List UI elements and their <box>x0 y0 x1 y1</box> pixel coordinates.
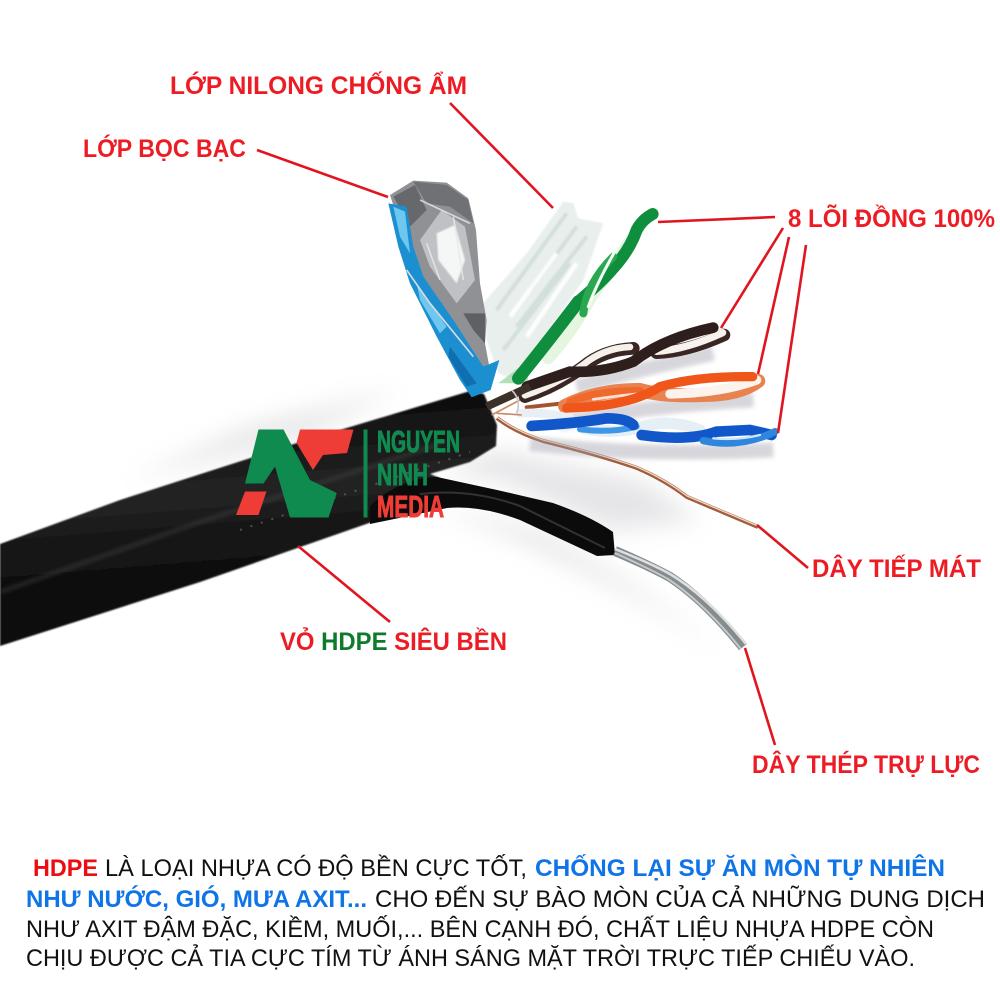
description paragraph: HDPE <box>33 855 98 882</box>
blue wire pair <box>520 413 775 443</box>
steel support wire <box>615 549 746 649</box>
logo: Nguyen Ninh Media <box>236 424 460 524</box>
black HDPE cable jacket <box>0 391 615 646</box>
soft photo shadows <box>130 390 720 650</box>
description paragraph <box>26 854 985 972</box>
label: steel wire: DÂY THÉP TRỰ LỰC <box>752 749 980 779</box>
label: nylon layer: LỚP NILONG CHỐNG ẨM <box>170 70 467 100</box>
description paragraph: NHƯ NƯỚC, GIÓ, MƯA AXIT... <box>26 885 367 913</box>
orange wire pair <box>527 377 758 408</box>
logo text <box>377 424 460 524</box>
description paragraph: CHỐNG LẠI SỰ ĂN MÒN TỰ NHIÊN <box>535 854 945 882</box>
aluminium foil shield <box>388 181 499 397</box>
label: copper cores: 8 LÕI ĐỒNG 100% <box>788 203 995 233</box>
description paragraph: CHỊU ĐƯỢC CẢ TIA CỰC TÍM TỪ ÁNH SÁNG MẶT TRỜI TRỰC TIẾP CHIẾU VÀO. <box>26 943 915 972</box>
green wire pair <box>498 214 653 383</box>
callout lines <box>257 103 808 745</box>
description paragraph: NHƯ AXIT ĐẬM ĐẶC, KIỀM, MUỐI,... BÊN CẠNH ĐÓ, CHẤT LIỆU NHỰA HDPE CÒN <box>26 915 934 943</box>
brown wire pair <box>525 328 724 397</box>
copper ground wire <box>497 417 758 527</box>
description paragraph: LÀ LOẠI NHỰA CÓ ĐỘ BỀN CỰC TỐT, <box>105 854 527 882</box>
label: HDPE jacket: VỎ HDPE SIÊU BỀN <box>280 626 507 656</box>
wire junction <box>487 387 530 415</box>
logo text: NINH <box>377 457 428 492</box>
logo text: MEDIA <box>377 489 444 524</box>
description paragraph: CHO ĐẾN SỰ BÀO MÒN CỦA CẢ NHỮNG DUNG DỊCH <box>375 884 985 913</box>
label: foil layer: LỚP BỌC BẠC <box>83 133 246 163</box>
logo mark <box>236 430 368 518</box>
wire shadows <box>530 353 773 452</box>
logo text: NGUYEN <box>377 424 460 459</box>
label: ground wire: DÂY TIẾP MÁT <box>812 553 981 583</box>
nylon moisture layer <box>483 202 603 380</box>
